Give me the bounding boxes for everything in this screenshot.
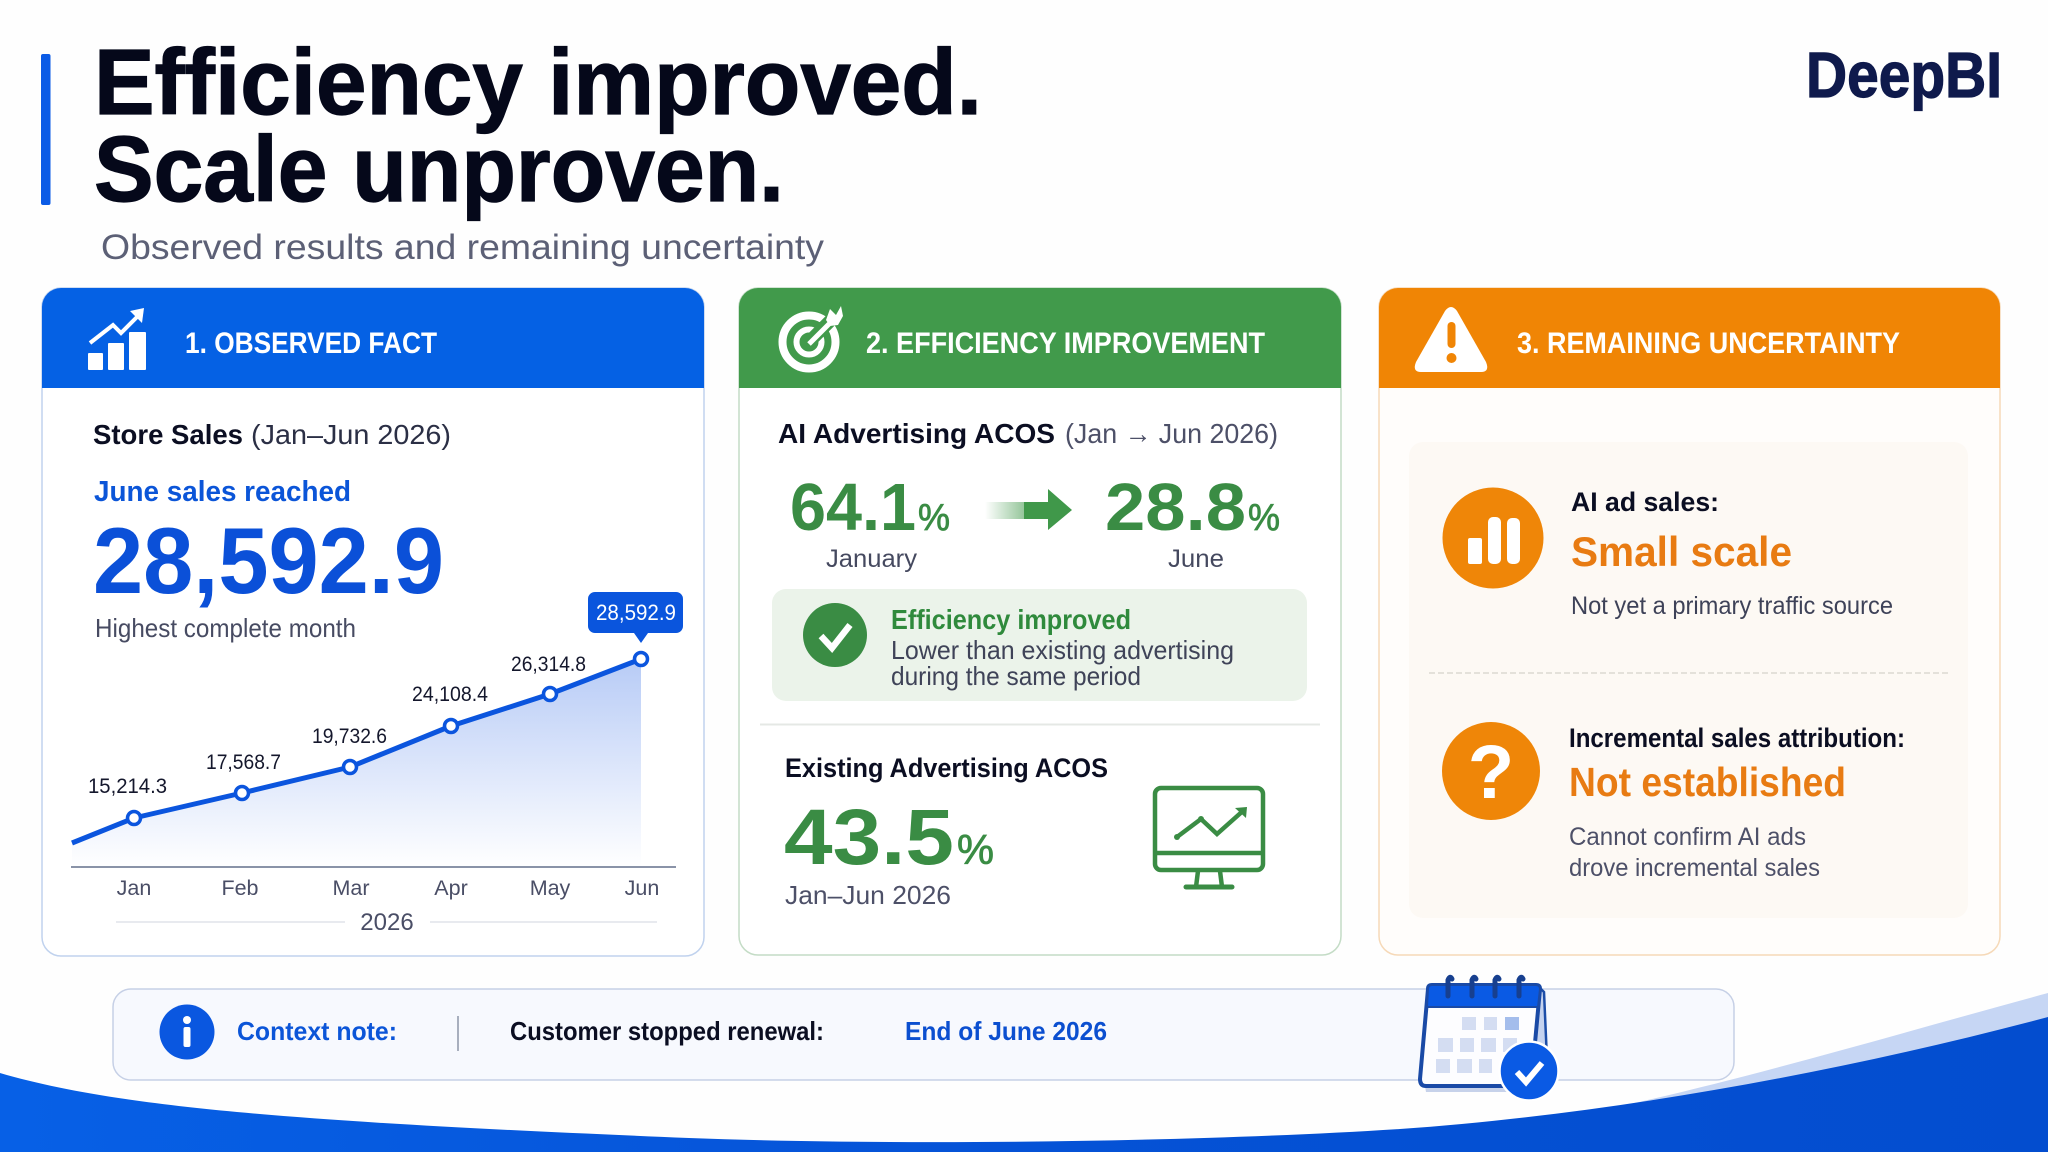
arrow: ACOS decrease [985, 489, 1072, 530]
item: incremental sales attribution: drove incremental sales [1569, 854, 1820, 882]
background wave [0, 993, 2048, 1152]
metric: January ACOS: 64.1 [790, 470, 916, 545]
title: Efficiency improved. [94, 30, 982, 134]
item: incremental sales attribution: Cannot confirm AI ads [1569, 823, 1806, 851]
context note bar: Context note: [237, 1016, 397, 1046]
line chart: store sales: May [530, 876, 571, 900]
panel header: efficiency improvement [739, 288, 1341, 388]
big metric: June sales reached [94, 476, 351, 508]
icon: warning triangle [1415, 307, 1487, 372]
line chart: store sales: Jun [625, 876, 659, 900]
line chart: store sales: 17,568.7 [206, 751, 281, 774]
callout: June value [588, 592, 683, 643]
context note bar [113, 989, 1734, 1080]
metric: January ACOS [790, 470, 950, 573]
icon: monitor with trend [1155, 788, 1263, 887]
callout: efficiency improved: during the same period [891, 661, 1141, 691]
line chart: store sales: Mar [332, 876, 370, 900]
chart subtitle [93, 419, 451, 450]
big metric [93, 476, 444, 643]
title [94, 30, 982, 221]
item: AI ad sales: AI ad sales: [1571, 487, 1719, 517]
icon: target [782, 306, 843, 368]
big metric: 28,592.9 [93, 508, 444, 613]
AI ACOS heading [778, 418, 1278, 449]
line chart: store sales: Apr [434, 876, 468, 900]
icon: small bars [1442, 488, 1544, 588]
metric: existing advertising ACOS: % [957, 826, 994, 873]
big metric: Highest complete month [95, 613, 356, 643]
metric: June ACOS: % [1248, 497, 1280, 539]
line chart: store sales: Feb [221, 876, 259, 900]
line chart: store sales [71, 592, 683, 936]
item: AI ad sales: Small scale [1571, 528, 1792, 575]
icon: question mark: ? [1468, 730, 1514, 815]
line chart: store sales: 26,314.8 [511, 653, 586, 676]
line chart: store sales: 19,732.6 [312, 725, 387, 748]
heading: 3. REMAINING UNCERTAINTY [1517, 327, 1900, 360]
line chart: store sales: 15,214.3 [88, 775, 167, 798]
panel: observed fact [42, 288, 704, 956]
metric: existing advertising ACOS: Existing Advertising ACOS [785, 753, 1108, 783]
context note bar: Customer stopped renewal: [510, 1016, 824, 1046]
line chart: store sales: 2026 [360, 909, 414, 936]
callout: efficiency improved: Lower than existing advertising [891, 635, 1234, 665]
heading: 1. OBSERVED FACT [185, 327, 437, 360]
icon: info [160, 1004, 214, 1060]
item: AI ad sales [1442, 487, 1893, 620]
metric: June ACOS: 28.8 [1105, 470, 1246, 545]
title accent bar [41, 54, 50, 205]
icon: rising bar chart [88, 308, 146, 370]
metric: existing advertising ACOS [784, 753, 1108, 910]
title: Scale unproven. [94, 117, 784, 221]
icon: question mark [1442, 722, 1540, 820]
metric: June ACOS [1105, 470, 1280, 573]
subtitle: Observed results and remaining uncertainty [101, 228, 825, 267]
AI ACOS heading: AI Advertising ACOS [778, 418, 1055, 449]
chart subtitle: Store Sales [93, 419, 243, 450]
item: incremental sales attribution [1442, 722, 1905, 882]
icon: check [803, 603, 867, 667]
item: AI ad sales: Not yet a primary traffic source [1571, 592, 1893, 620]
heading: 2. EFFICIENCY IMPROVEMENT [866, 327, 1265, 360]
chart subtitle: (Jan–Jun 2026) [251, 419, 451, 450]
panel: remaining uncertainty [1379, 288, 2000, 955]
item: incremental sales attribution: Not established [1569, 759, 1846, 805]
callout: June value: 28,592.9 [596, 600, 676, 625]
metric: January ACOS: January [826, 545, 917, 573]
icon: calendar with check [1420, 977, 1558, 1100]
logo: DeepBI: DeepBI [1806, 39, 2002, 111]
line chart: store sales: 24,108.4 [412, 683, 488, 706]
line chart: store sales: Jan [117, 876, 151, 900]
callout: efficiency improved: Efficiency improved [891, 604, 1131, 635]
panel: efficiency improvement [739, 288, 1341, 955]
metric: existing advertising ACOS: 43.5 [784, 792, 954, 881]
metric: June ACOS: June [1168, 545, 1224, 573]
panel header: observed fact [42, 288, 704, 388]
AI ACOS heading: (Jan → Jun 2026) [1065, 418, 1278, 449]
callout: efficiency improved [772, 589, 1307, 701]
context note bar: End of June 2026 [905, 1016, 1107, 1046]
metric: January ACOS: % [918, 497, 950, 539]
panel header: remaining uncertainty [1379, 288, 2000, 388]
metric: existing advertising ACOS: Jan–Jun 2026 [785, 880, 951, 910]
item: incremental sales attribution: Incremental sales attribution: [1569, 723, 1905, 753]
